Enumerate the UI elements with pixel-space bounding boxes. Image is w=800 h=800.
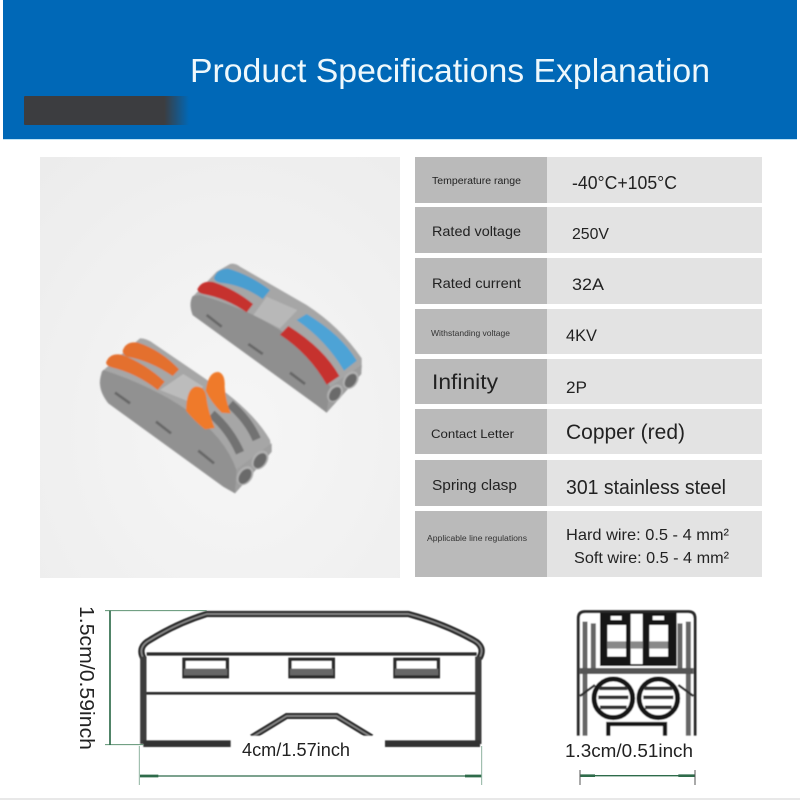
- row: rated voltage: Rated voltage: [432, 223, 521, 239]
- row: applicable line regulations: [415, 511, 762, 577]
- row: contact letter: Copper (red): [566, 421, 685, 444]
- row: spring clasp: Spring clasp: [432, 477, 517, 494]
- width dimension line: [580, 770, 695, 785]
- diagram: side view with dimensions: [75, 606, 482, 785]
- connector: blue and red levers: [190, 264, 362, 413]
- row: applicable line regulations: Soft wire: 0.5 - 4 mm²: [574, 550, 730, 567]
- row: contact letter: Contact Letter: [431, 427, 514, 441]
- row: applicable line regulations: Hard wire: 0.5 - 4 mm²: [566, 527, 730, 544]
- header banner: [3, 0, 797, 140]
- row: temperature range: [415, 157, 762, 203]
- bottom edge band: [0, 798, 800, 800]
- row: rated voltage: 250V: [572, 226, 609, 243]
- row: rated current: [415, 258, 762, 304]
- side view outline: [141, 614, 482, 746]
- row: temperature range: -40°C+105°C: [572, 173, 677, 193]
- row: rated current: Rated current: [432, 275, 521, 291]
- row: withstanding voltage: Withstanding voltage: [431, 328, 510, 338]
- row: spring clasp: 301 stainless steel: [566, 477, 726, 499]
- row: rated voltage: [415, 207, 762, 253]
- row: contact letter: [415, 409, 762, 454]
- row: rated current: 32A: [572, 275, 605, 294]
- end view outline: [578, 612, 695, 736]
- end width label: 1.3cm/0.51inch: [565, 741, 693, 761]
- row: temperature range: Temperature range: [432, 176, 521, 187]
- diagram: end view with dimensions: [565, 612, 695, 785]
- row: applicable line regulations: Applicable line regulations: [427, 534, 527, 543]
- redacted logo box: [24, 96, 189, 125]
- row: spring clasp: [415, 460, 762, 506]
- row: withstanding voltage: 4KV: [566, 326, 598, 345]
- title: Product Specifications Explanation: [190, 52, 710, 89]
- row: infinity: [415, 359, 762, 404]
- height label: 1.5cm/0.59inch: [75, 606, 97, 750]
- width label: 4cm/1.57inch: [242, 740, 350, 760]
- panel: product photo: [40, 157, 400, 578]
- connector: orange levers: [100, 338, 272, 493]
- row: infinity: Infinity: [432, 371, 499, 394]
- panel: specification table: [415, 157, 762, 577]
- row: withstanding voltage: [415, 309, 762, 354]
- dimension lines: [105, 611, 482, 785]
- row: infinity: 2P: [566, 378, 587, 397]
